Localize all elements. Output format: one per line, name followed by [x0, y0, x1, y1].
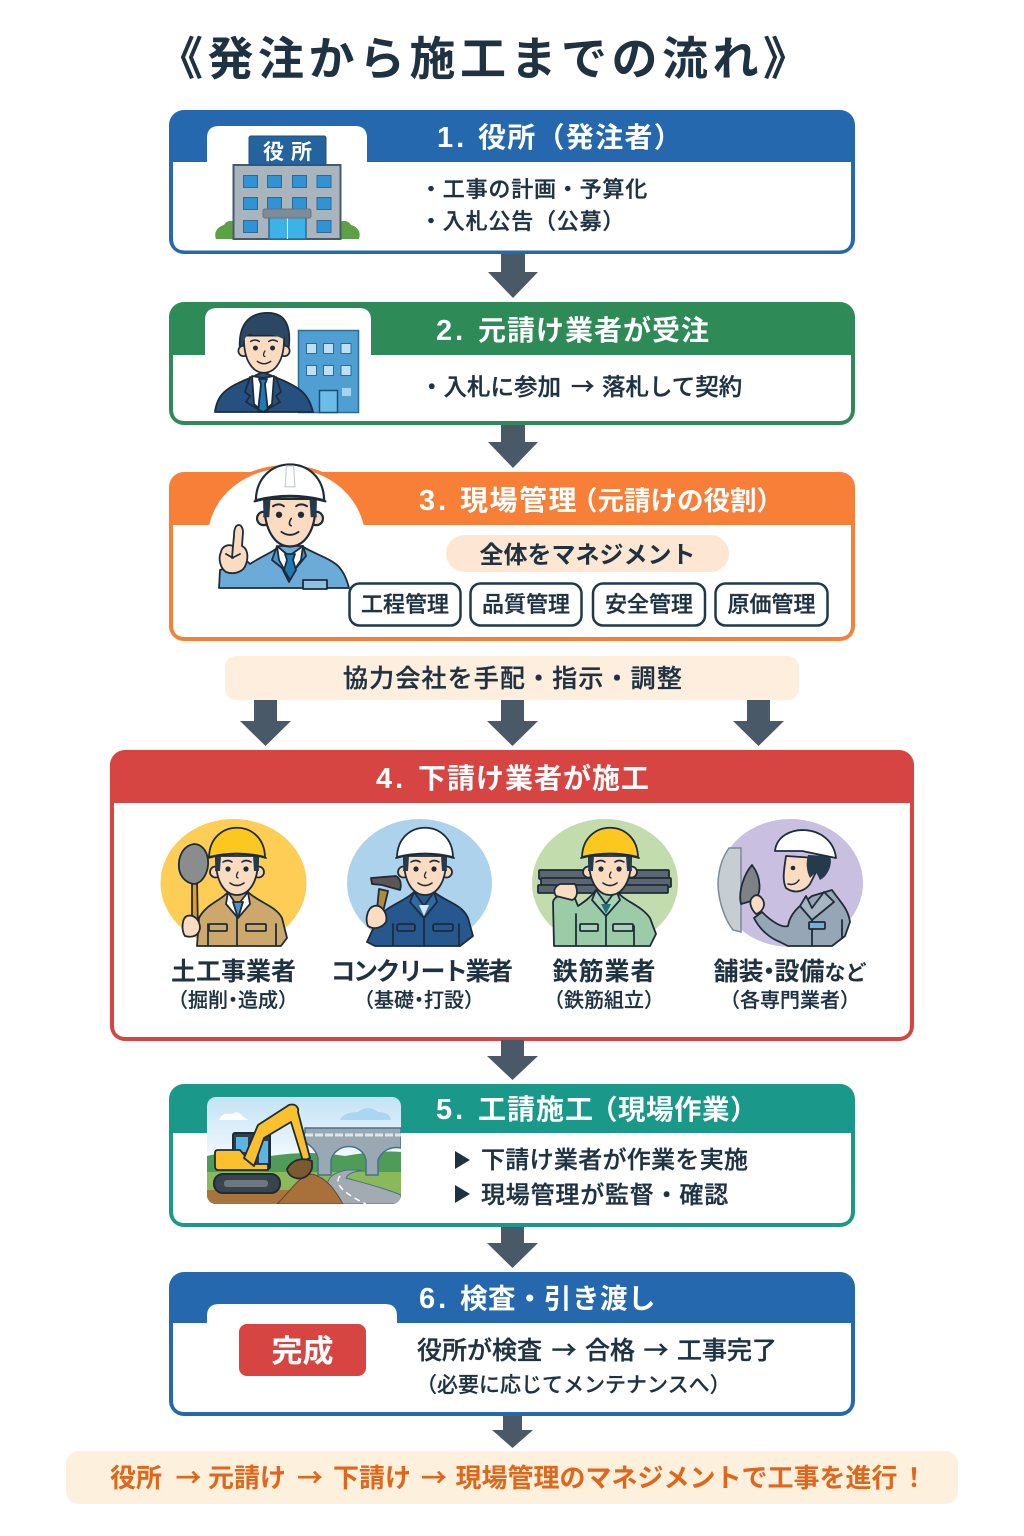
heading: step 2: 元請け業者が受注 [478, 314, 710, 346]
band: summary: 現場管理のマネジメントで工事を進行 [456, 1463, 898, 1493]
heading: step 4: 下請け業者が施工 [418, 762, 650, 794]
text: step 1 tasks [420, 177, 648, 234]
icon: site manager pointing up [219, 464, 349, 589]
arrow: step 1 to 2 [488, 254, 538, 298]
text: step 2 task: → [571, 368, 594, 402]
text: step 5 tasks [455, 1147, 748, 1209]
labels: subcontractor types: （各専門業者） [720, 989, 860, 1012]
band: summary: → [421, 1458, 447, 1495]
band: summary: 役所 [110, 1463, 162, 1493]
panel: step 6 [169, 1272, 855, 1416]
panel: step 2 [169, 302, 855, 425]
band: summary [66, 1451, 958, 1504]
labels: subcontractor types [168, 958, 867, 1012]
text: step 1 tasks: ・工事の計画・予算化 [420, 177, 648, 202]
labels: subcontractor types: 鉄筋業者 [552, 958, 657, 986]
icon: government office building [215, 136, 360, 239]
text: step 6 flow: → [644, 1331, 669, 1367]
text: step 6 flow [416, 1331, 777, 1397]
text: step 5 tasks: 現場管理が監督・確認 [481, 1182, 729, 1209]
badge: completed: 完成 [272, 1334, 334, 1369]
heading: step 5: 工請施工 [478, 1094, 594, 1125]
labels: subcontractor types: コンクリート業者 [330, 958, 512, 986]
boxes: management items: 安全管理 [605, 592, 693, 617]
panel: step 1 [169, 110, 855, 254]
band: summary: → [176, 1458, 202, 1495]
text: step 6 flow: 役所が検査 [417, 1337, 542, 1365]
icon: contractor in suit with building [215, 313, 358, 412]
boxes: management items [350, 584, 828, 626]
badge: completed [239, 1324, 366, 1376]
band: summary: 元請け [208, 1463, 286, 1493]
pill: whole-site management [446, 535, 729, 572]
labels: subcontractor types: 土工事業者 [171, 958, 296, 986]
worker: earthwork [160, 819, 306, 947]
arrow: step 4 to 5 [487, 1040, 538, 1080]
heading: step 6: 検査・引き渡し [460, 1283, 656, 1314]
labels: subcontractor types: （掘削・造成） [168, 989, 298, 1012]
text: step 6 flow: （必要に応じてメンテナンスへ） [416, 1374, 731, 1397]
text: step 1 tasks: ・入札公告（公募） [420, 209, 625, 234]
labels: subcontractor types: 舗装・設備など [713, 958, 867, 986]
text: step 5 tasks: 下請け業者が作業を実施 [481, 1147, 748, 1174]
text: step 6 flow: 合格 [585, 1337, 635, 1365]
heading: step 3: 現場管理 [460, 485, 578, 516]
arrow: step 2 to 3 [488, 425, 538, 468]
heading: step 5: （現場作業） [590, 1094, 758, 1125]
band: summary: ！ [901, 1463, 927, 1493]
band: coordinate partner companies [225, 656, 799, 700]
worker: paving and equipment [718, 819, 863, 947]
text: step 6 flow: → [552, 1331, 577, 1367]
text: step 2 task: ・入札に参加 [420, 374, 561, 400]
boxes: management items: 原価管理 [727, 592, 816, 617]
title: 《発注から施工までの流れ》 [157, 33, 814, 85]
band: summary: → [297, 1458, 323, 1495]
labels: subcontractor types: （鉄筋組立） [544, 989, 664, 1012]
panel: step 4 [110, 750, 914, 1041]
pill: whole-site management: 全体をマネジメント [480, 542, 696, 569]
heading: step 2: 2. [436, 315, 466, 347]
band: summary: 下請け [333, 1463, 411, 1493]
worker: concrete [347, 819, 492, 947]
heading: step 1: 役所（発注者） [478, 122, 683, 153]
arrow: step 5 to 6 [487, 1227, 538, 1268]
heading: step 5: 5. [436, 1094, 466, 1126]
heading: step 4: 4. [376, 763, 406, 795]
heading: step 3 [419, 485, 783, 517]
arrows: to subcontractors [240, 700, 784, 746]
text: step 2 task: 落札して契約 [602, 374, 742, 400]
boxes: management items: 工程管理 [361, 592, 449, 617]
text: step 6 flow: 工事完了 [677, 1337, 777, 1365]
heading: step 5 [436, 1094, 758, 1126]
panel: step 3 [169, 464, 855, 641]
worker: rebar [532, 819, 678, 947]
arrow: step 6 to summary [492, 1416, 533, 1448]
heading: step 3: 3. [419, 485, 449, 517]
band: coordinate partner companies: 協力会社を手配・指示・調整 [343, 665, 683, 693]
heading: step 3: （元請けの役割） [571, 486, 783, 516]
panel: step 5 [169, 1084, 855, 1227]
illustration: excavator and bridge [207, 1097, 401, 1204]
icon: government office building: 役所 [263, 141, 319, 164]
heading: step 1: 1. [437, 122, 467, 154]
labels: subcontractor types: （基礎・打設） [354, 989, 484, 1012]
heading: step 6: 6. [419, 1283, 449, 1315]
boxes: management items: 品質管理 [482, 592, 570, 617]
